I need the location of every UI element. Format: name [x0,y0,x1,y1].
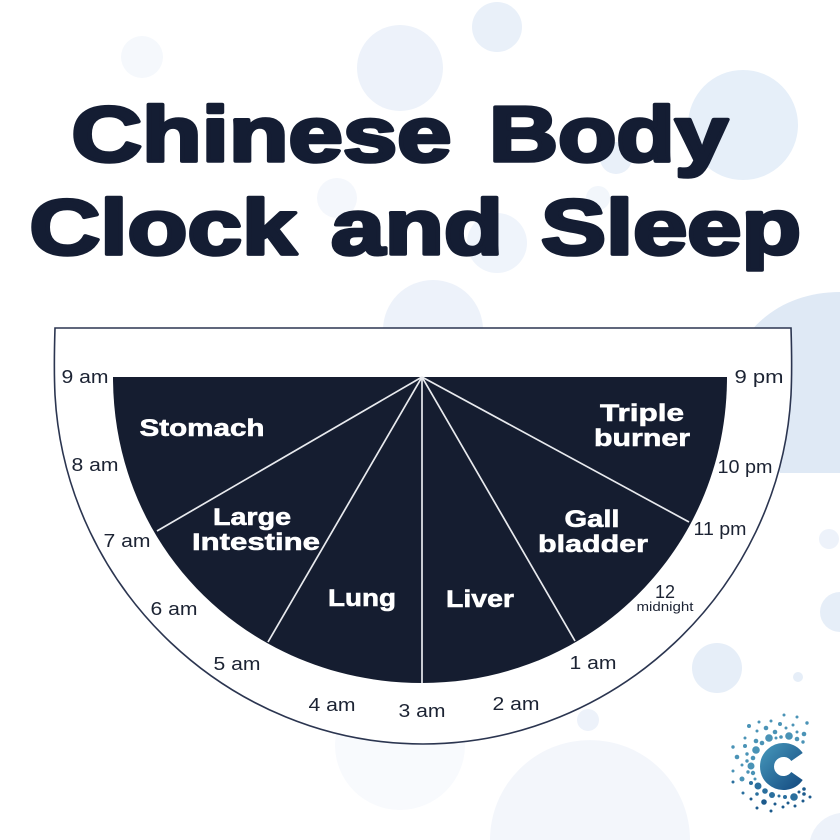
hour labels: midnight [636,600,694,614]
title: and [331,183,503,271]
organ labels: Liver [446,586,514,613]
outer semicircle dial [54,328,792,744]
hour labels: 3 am [398,701,446,721]
hour labels: 12 [655,582,675,602]
hour labels: 9 am [62,367,108,387]
dark inner semicircle with organ sectors [113,377,727,683]
hour labels: 9 pm [734,367,784,387]
title: Body [489,90,728,178]
organ labels: Gall [564,506,620,533]
title [30,90,801,271]
hour labels: 11 pm [694,519,746,539]
title: Clock [30,183,297,271]
organ labels: Lung [328,585,396,612]
hour labels [62,367,784,721]
title: Sleep [541,183,801,271]
hour labels: 6 am [150,599,198,619]
organ labels: Stomach [140,415,264,442]
organ labels: Large [213,504,291,531]
organ labels: Intestine [192,529,320,556]
organ labels: bladder [538,531,648,558]
organ labels [140,400,690,613]
organ labels: Triple [600,400,684,427]
hour labels: 4 am [308,695,356,715]
hour labels: 7 am [104,531,150,551]
logo: dotted C [731,714,812,812]
hour labels: 10 pm [718,457,772,477]
hour labels: 5 am [214,654,260,674]
sector dividing lines [157,377,689,683]
hour labels: 2 am [492,694,540,714]
hour labels: 8 am [72,455,118,475]
hour labels: 1 am [570,653,616,673]
organ labels: burner [594,425,690,452]
title: Chinese [72,90,452,178]
